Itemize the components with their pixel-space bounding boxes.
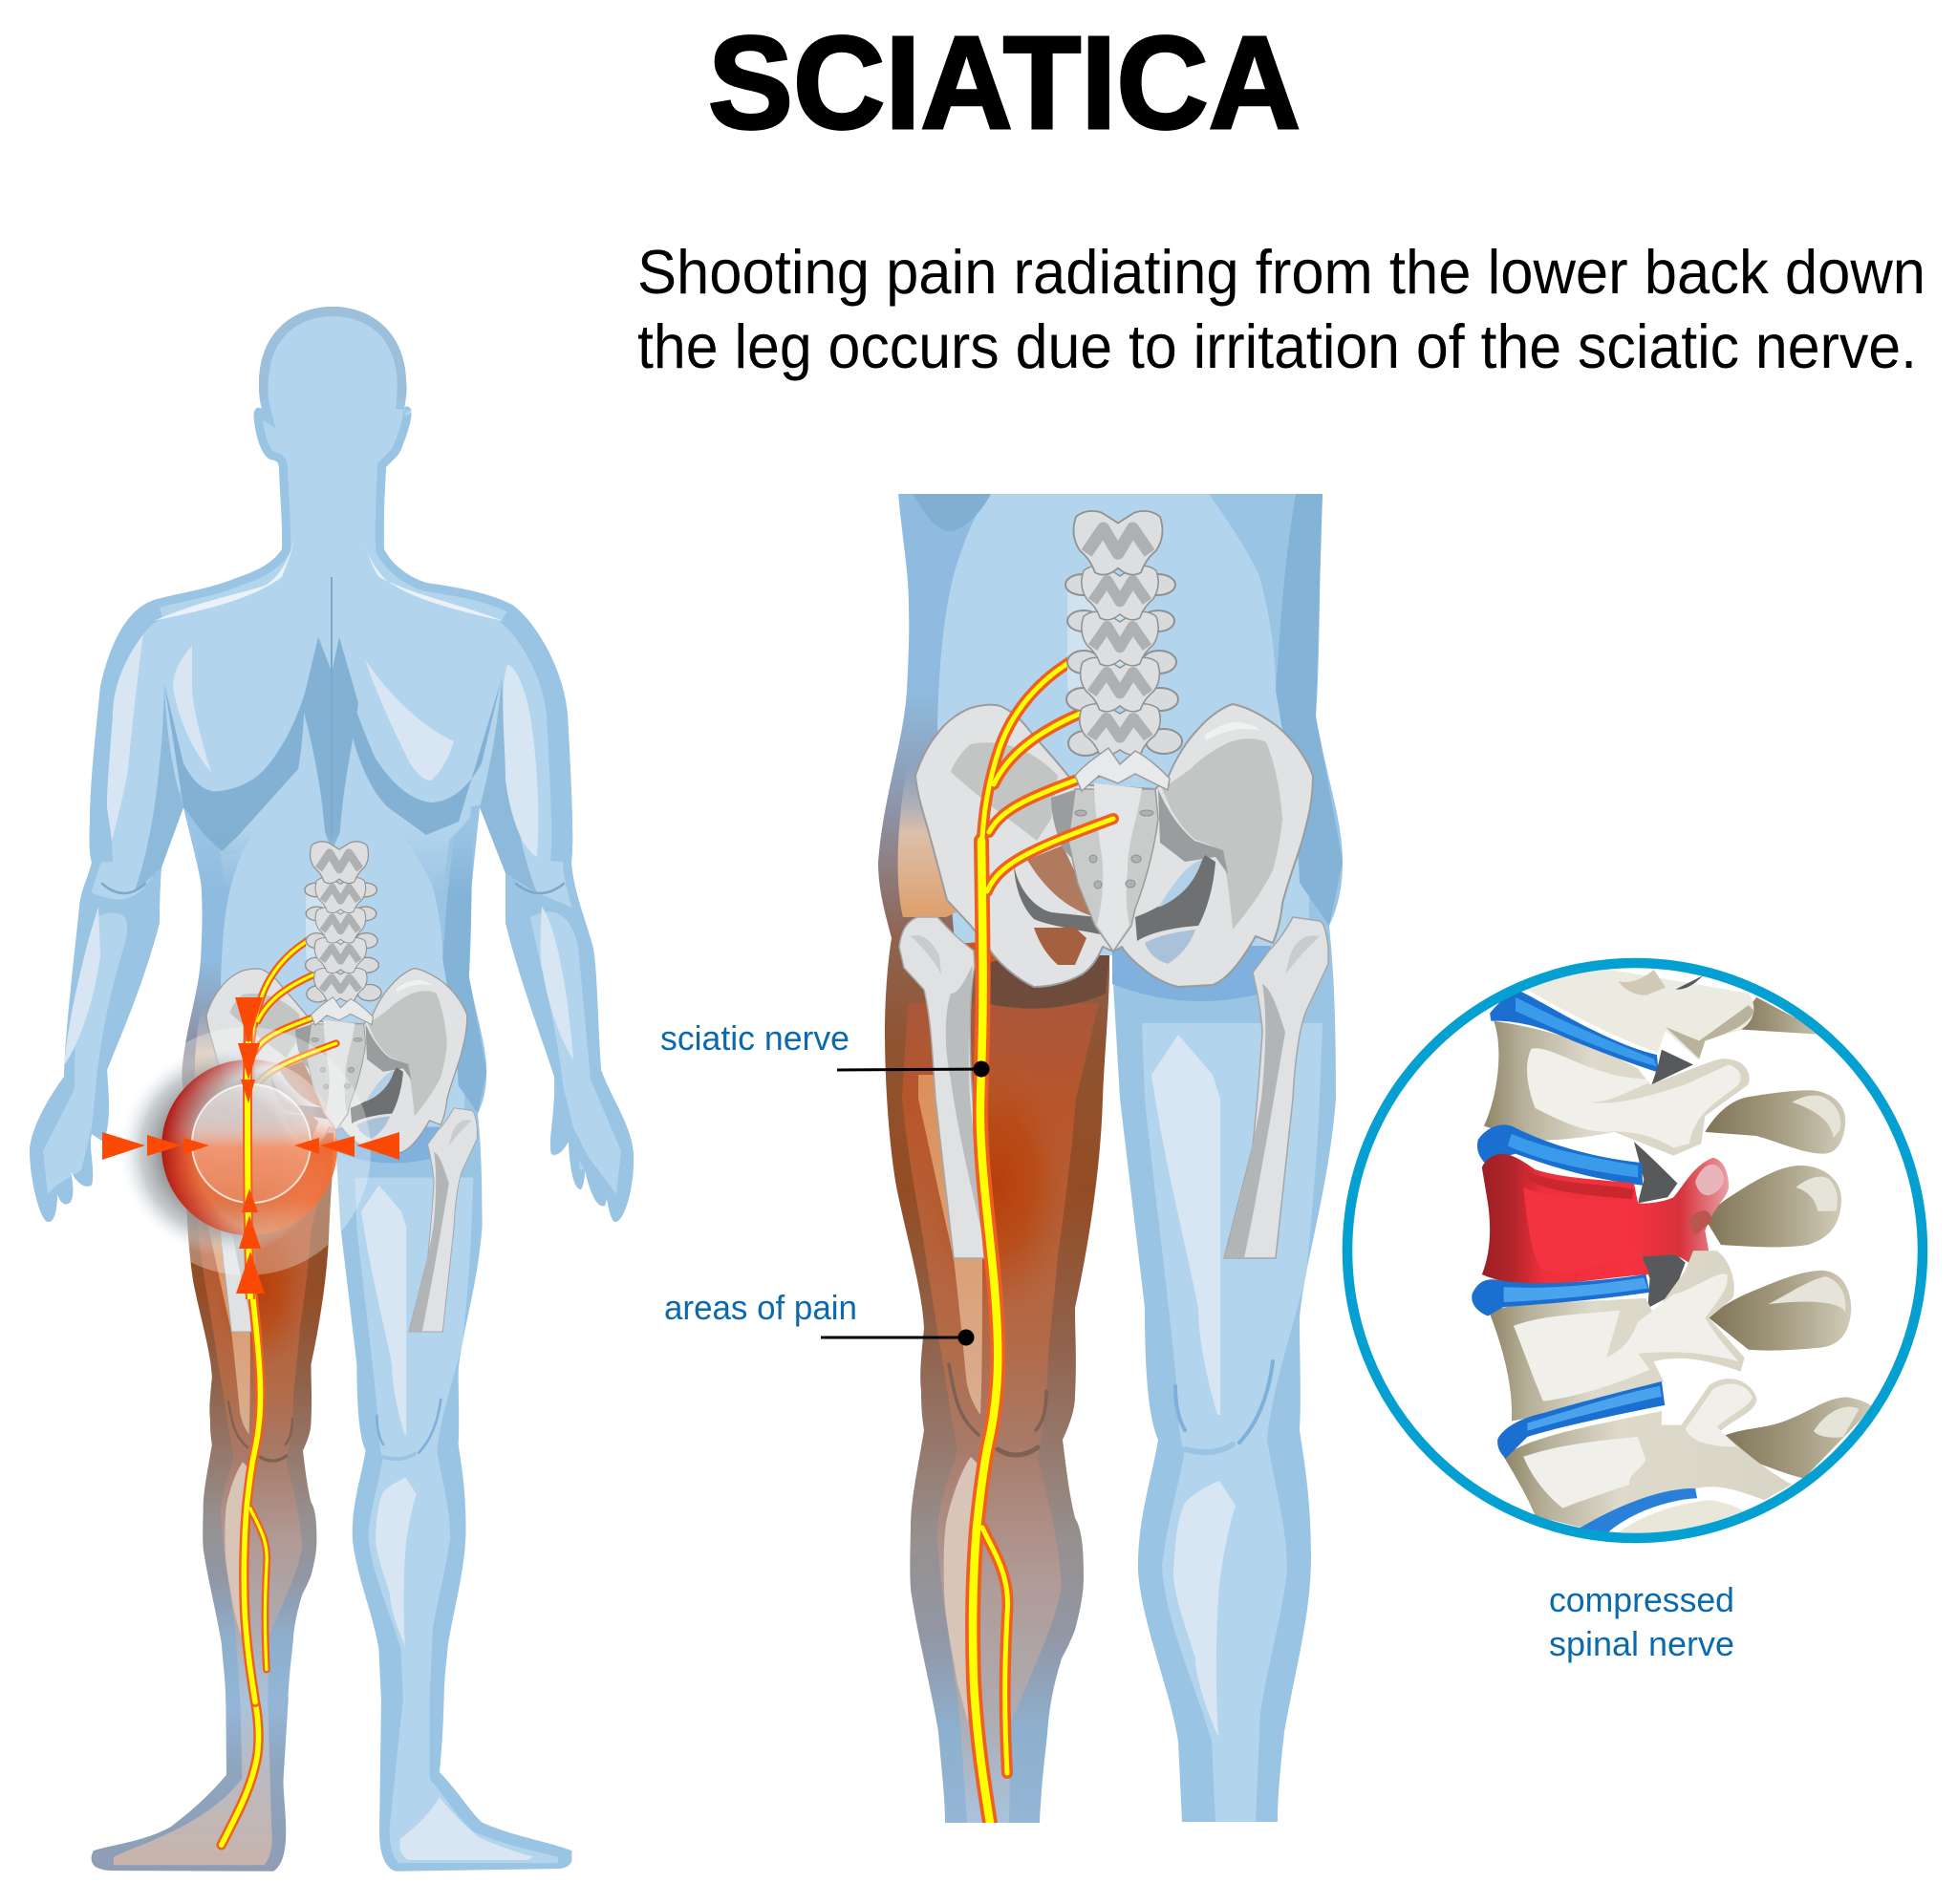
- top vertebra: [1523, 967, 1753, 1060]
- hands: [38, 1072, 100, 1206]
- torso side shading: [183, 808, 223, 883]
- disc 1: [1490, 990, 1659, 1073]
- feet: [92, 1697, 571, 1872]
- callout: sciatic nerve: [660, 1018, 990, 1078]
- description text: Shooting pain radiating from the lower back down: [637, 237, 1925, 307]
- back highlights: [64, 634, 573, 1065]
- collar highlights: [154, 539, 504, 621]
- disc 3: [1472, 1274, 1650, 1316]
- spinal cord stub: [1106, 494, 1112, 524]
- disc 5: [1579, 1488, 1697, 1534]
- spinous processes: [1705, 997, 1873, 1479]
- nerve core over glow: [247, 1041, 250, 1299]
- elbow and forearm shading: [64, 867, 160, 1077]
- vertebra 2: [1484, 1021, 1750, 1156]
- callout: areas of pain: [664, 1288, 975, 1345]
- spine line: [331, 577, 333, 841]
- head rim: [258, 307, 407, 401]
- description text: [637, 237, 1925, 381]
- callout: sciatic nerve: sciatic nerve: [660, 1018, 849, 1058]
- upper body silhouette: [30, 307, 634, 1222]
- title: SCIATICA: [708, 10, 1301, 157]
- process highlights: [1768, 1096, 1860, 1438]
- herniated red vertebra: [1482, 1154, 1729, 1284]
- label: compressed spinal nerve: compressed: [1549, 1580, 1734, 1619]
- vertebra 3: [1490, 1251, 1745, 1421]
- left figure: full body back view: [30, 307, 634, 1872]
- nerve over glow: [247, 1013, 250, 1299]
- circular inset: compressed disc: [1347, 963, 1923, 1538]
- elbow lines: [102, 884, 564, 893]
- inset ring: [1347, 963, 1923, 1538]
- vertebra 4: [1504, 1379, 1792, 1528]
- foramina: [1652, 1050, 1693, 1084]
- vertebra 5: [1619, 1500, 1743, 1533]
- zoomed lower body: [878, 494, 1343, 1823]
- scapula shadows: [164, 577, 502, 852]
- lumbar spine on full figure: [305, 842, 381, 1025]
- middle figure: pelvis, legs and sciatic nerve: [878, 494, 1343, 1823]
- callout: areas of pain: areas of pain: [664, 1288, 857, 1327]
- pain arrows: [102, 997, 399, 1294]
- label: compressed spinal nerve: spinal nerve: [1549, 1624, 1734, 1663]
- disc 2: [1477, 1124, 1643, 1186]
- armpit shading: [134, 684, 183, 893]
- outer shoulder and upper arm rim: [90, 599, 158, 863]
- pain glow: [119, 1027, 371, 1275]
- disc 4: [1497, 1381, 1665, 1459]
- lower body, pelvis and nerve: [182, 830, 486, 1702]
- label: compressed spinal nerve: [1549, 1580, 1734, 1663]
- body rim shading: [30, 307, 634, 1222]
